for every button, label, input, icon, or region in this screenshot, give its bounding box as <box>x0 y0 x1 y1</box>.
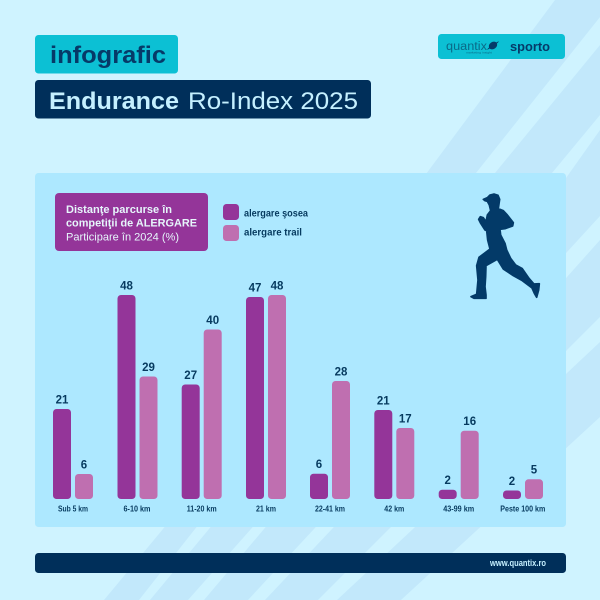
group: Peste 100 km: 2 <box>509 476 515 488</box>
group: 22-41 km: 6 <box>316 459 322 471</box>
group: Sub 5 km: 21 <box>56 394 69 406</box>
group: Peste 100 km: Peste 100 km <box>500 504 546 514</box>
group: 43-99 km: 16 <box>463 416 476 428</box>
group: 11-20 km: 27 <box>184 370 197 382</box>
group: Peste 100 km: 5 <box>531 464 538 476</box>
chart heading box: Participare în 2024 (%) <box>66 232 179 244</box>
group: 6-10 km: 29 <box>142 362 155 374</box>
group: 42 km <box>374 396 414 514</box>
group: 11-20 km: 11-20 km <box>187 504 217 514</box>
group: 42 km: 21 <box>377 396 390 408</box>
group: 43-99 km: 43-99 km <box>443 504 475 514</box>
group: 6-10 km <box>118 280 158 514</box>
title: Endurance Ro-Index 2025 <box>35 80 371 118</box>
chart heading box: Distanţe parcurse în <box>66 204 172 216</box>
chart heading box <box>55 193 208 251</box>
group: 22-41 km <box>310 366 350 514</box>
footer bar <box>35 553 566 573</box>
group: 6-10 km: 6-10 km <box>124 504 151 514</box>
legend: alergare trail <box>244 227 302 239</box>
logos panel <box>438 34 565 59</box>
group: 21 km: 48 <box>271 280 284 292</box>
group: 42 km: 17 <box>399 414 412 426</box>
group: 42 km: 42 km <box>384 504 405 514</box>
group: 43-99 km <box>439 416 479 514</box>
legend <box>223 204 308 241</box>
group: 21 km: 21 km <box>256 504 276 514</box>
group: 43-99 km: 2 <box>444 475 451 487</box>
logo: quantix <box>446 40 499 54</box>
group: Sub 5 km: 6 <box>81 460 87 472</box>
panel: chart area <box>35 173 566 527</box>
icon: runner silhouette <box>471 194 539 298</box>
footer bar: www.quantix.ro <box>489 558 546 569</box>
group: 22-41 km: 22-41 km <box>315 504 345 514</box>
group: 21 km: 47 <box>249 282 261 294</box>
legend: alergare şosea <box>244 208 308 220</box>
chart heading box: competiţii de ALERGARE <box>66 218 197 230</box>
group: 6-10 km: 48 <box>120 280 133 292</box>
logo: quantix: marketing insight <box>466 50 492 54</box>
heading label: infografic: infografic <box>50 42 166 69</box>
title: Endurance Ro-Index 2025: Endurance <box>49 88 179 115</box>
group: Sub 5 km <box>53 394 93 514</box>
logo: quantix: quantix <box>446 41 487 53</box>
group: Sub 5 km: Sub 5 km <box>58 504 88 514</box>
group: 22-41 km: 28 <box>335 366 348 378</box>
title: Endurance Ro-Index 2025: Ro-Index 2025 <box>188 88 358 115</box>
group: 21 km <box>246 280 286 514</box>
bar chart <box>53 280 546 514</box>
group: 11-20 km <box>182 315 222 514</box>
heading label: infografic <box>35 35 178 74</box>
group: 11-20 km: 40 <box>206 315 219 327</box>
logo: sporto: sporto <box>510 39 550 54</box>
group: Peste 100 km <box>500 464 546 514</box>
